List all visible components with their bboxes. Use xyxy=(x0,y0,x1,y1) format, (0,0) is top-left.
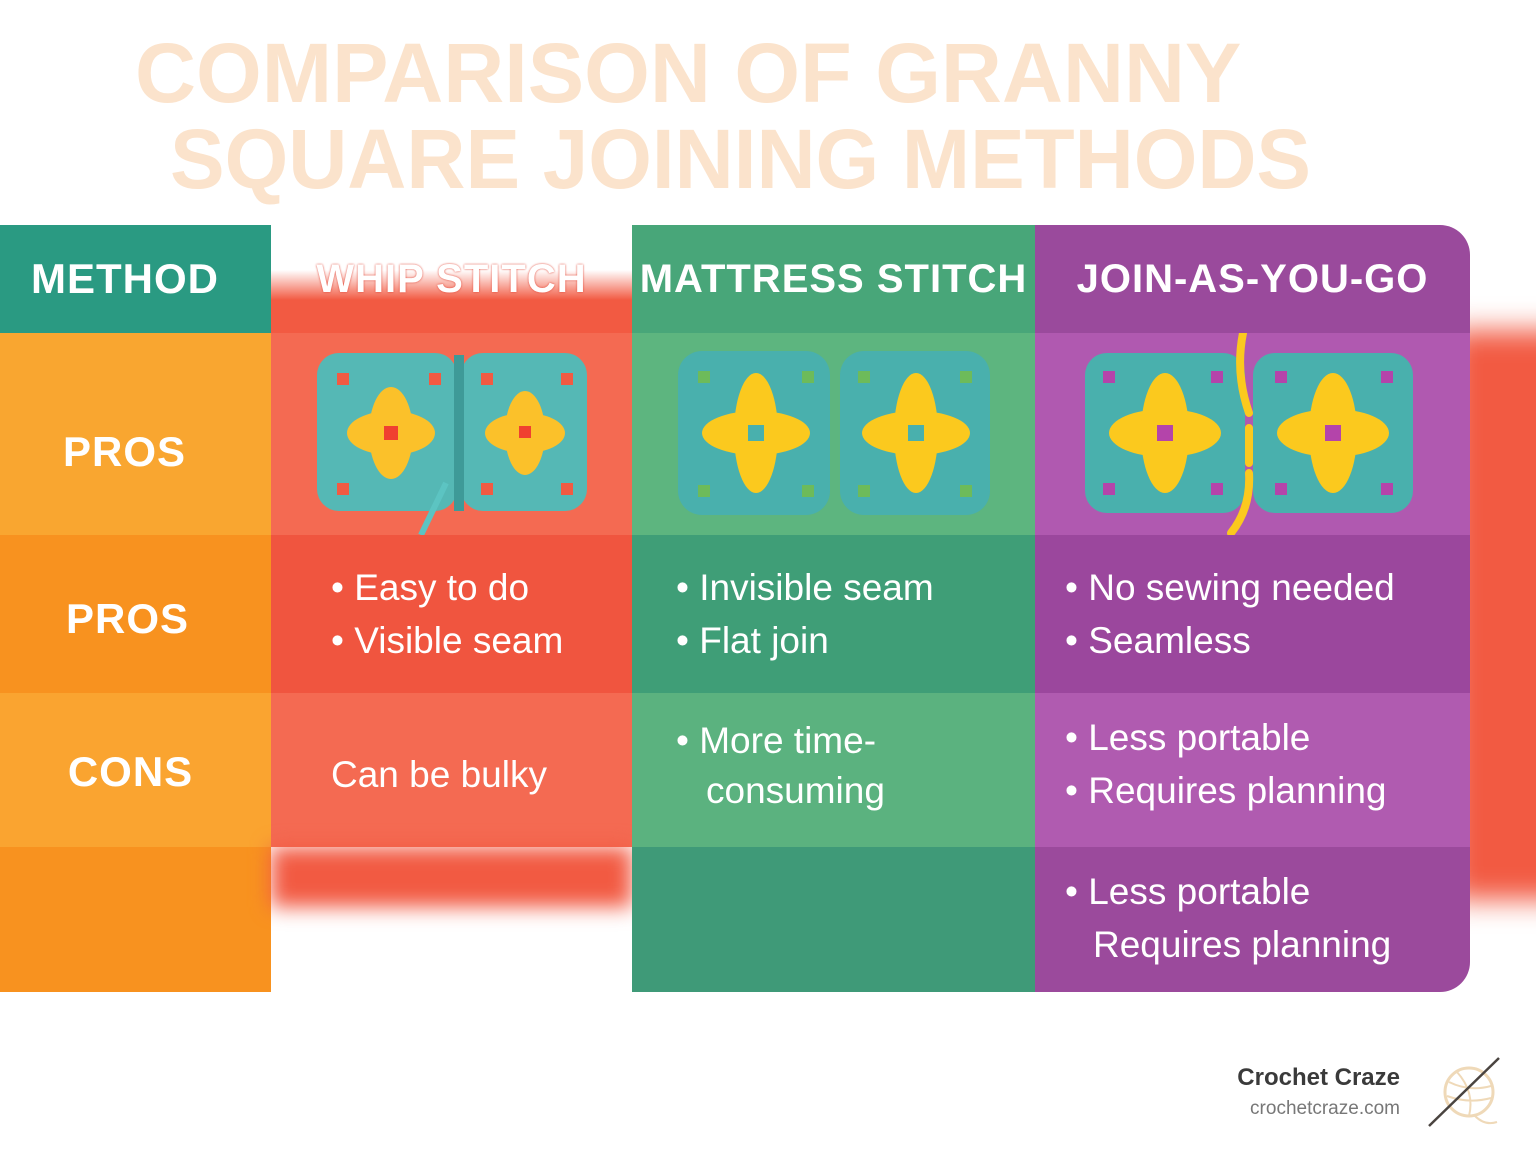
header mattress xyxy=(632,225,1035,333)
icon: yarn ball xyxy=(1428,1057,1500,1127)
label pros 2: PROS xyxy=(66,595,189,642)
text jayg cons: Requires planning xyxy=(1088,770,1386,811)
text jayg extra: Less portable xyxy=(1088,871,1310,912)
header jayg xyxy=(1035,225,1470,333)
empty xyxy=(632,847,1035,992)
text whip pros: Easy to do xyxy=(354,567,529,608)
right red smear xyxy=(1450,330,1536,900)
text jayg pros: No sewing needed xyxy=(1088,567,1395,608)
text jayg pros: Seamless xyxy=(1088,620,1251,661)
brand text xyxy=(1237,1064,1400,1119)
label pros 2 xyxy=(0,535,271,693)
title: COMPARISON OF GRANNY xyxy=(135,26,1241,120)
text whip pros: Visible seam xyxy=(354,620,563,661)
label cons: CONS xyxy=(68,748,193,795)
title xyxy=(135,26,1311,206)
panel: mattress stitch xyxy=(632,225,1035,992)
header whip xyxy=(271,225,632,333)
text jayg cons xyxy=(1035,693,1470,847)
text jayg extra xyxy=(1035,847,1470,992)
image mattress xyxy=(632,333,1035,535)
header whip: WHIP STITCH xyxy=(316,256,587,300)
empty cell xyxy=(0,847,271,992)
label pros: PROS xyxy=(63,428,186,475)
text jayg cons: Less portable xyxy=(1088,717,1310,758)
label cons xyxy=(0,693,271,847)
text whip pros xyxy=(271,535,632,693)
header mattress: MATTRESS STITCH xyxy=(640,256,1027,300)
title: SQUARE JOINING METHODS xyxy=(170,112,1311,206)
panel: method column xyxy=(0,225,271,992)
text whip cons xyxy=(271,693,632,847)
smear xyxy=(271,847,632,907)
text mattress cons: consuming xyxy=(706,770,885,811)
panel: join-as-you-go xyxy=(1035,225,1470,992)
text jayg extra: Requires planning xyxy=(1093,924,1391,965)
text jayg pros xyxy=(1035,535,1470,693)
image jayg xyxy=(1035,333,1470,535)
text mattress cons: More time- xyxy=(699,720,876,761)
image whip xyxy=(271,333,632,535)
header method text: METHOD xyxy=(31,255,219,302)
header jayg: JOIN-AS-YOU-GO xyxy=(1077,256,1428,300)
panel: whip stitch xyxy=(260,256,632,924)
text mattress cons xyxy=(632,693,1035,847)
brand text: crochetcraze.com xyxy=(1250,1098,1400,1119)
text mattress pros xyxy=(632,535,1035,693)
label pros xyxy=(0,333,271,535)
text mattress pros: Invisible seam xyxy=(699,567,934,608)
brand text: Crochet Craze xyxy=(1237,1064,1400,1091)
text whip cons: Can be bulky xyxy=(331,754,547,795)
text mattress pros: Flat join xyxy=(699,620,829,661)
